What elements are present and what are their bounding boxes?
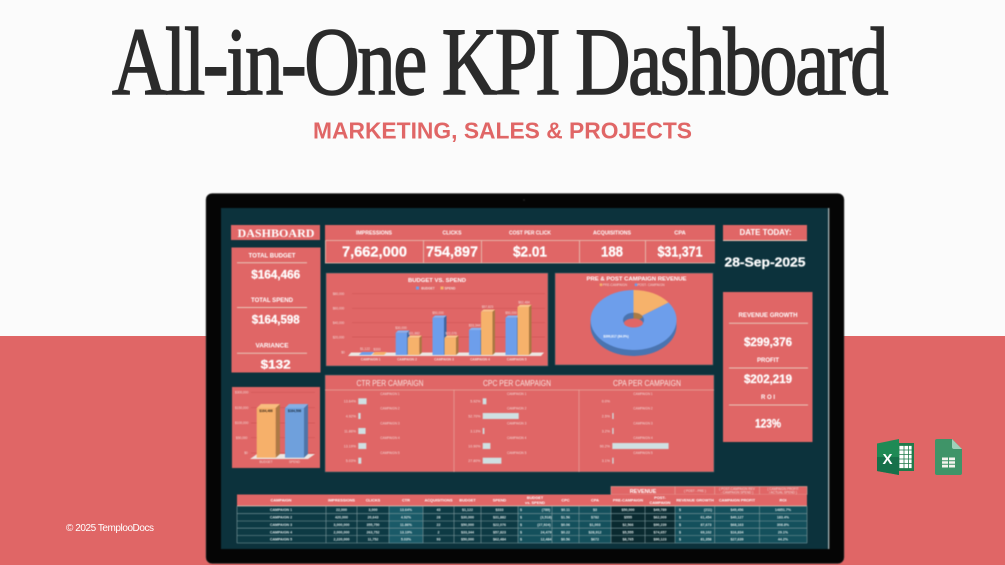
panel: budget vs spend total chart: $100,000 (235, 421, 249, 425)
table row: campaign 1: 14851.7% (775, 508, 792, 512)
table row: campaign 4: $57,823 (493, 530, 506, 534)
table row: campaign 1: $50,000 (622, 508, 634, 512)
panel: revenue growth: $299,376 (744, 337, 792, 349)
table row: campaign 4: 13.19% (400, 530, 413, 534)
revenue table header band: / ACTUAL SPEND ) (769, 490, 797, 494)
table row: campaign 4: 29.1% (778, 530, 789, 534)
table row: campaign 2: (3,518) (540, 516, 552, 520)
bars: campaign 3: $50,000 (432, 311, 444, 315)
panel: dashboard title: DASHBOARD (238, 228, 314, 240)
table row: campaign 3: 355,750 (366, 523, 380, 527)
panel: revenue growth: PROFIT (757, 358, 779, 364)
table row: campaign 5: $27,639 (730, 538, 744, 542)
panel: budget vs spend total chart: $50,000 (236, 436, 248, 440)
subtitle: MARKETING, SALES & PROJECTS (313, 118, 692, 144)
panel: date today: 28-Sep-2025 (724, 256, 806, 270)
table row: campaign 4: 2,000,000 (334, 530, 350, 534)
table header: BUDGET (459, 498, 476, 502)
panel: budget vs spend total chart (232, 387, 320, 468)
table row: campaign 5: 44.2% (778, 538, 789, 542)
legend: SPEND (445, 286, 456, 290)
legend (416, 286, 456, 290)
panel: budget vs spend chart: $80,000 (333, 292, 344, 296)
table row: campaign 2: 420,000 (335, 516, 348, 520)
table header: CAMPAIGN PROFIT (719, 498, 756, 502)
table row: campaign 4: $5,555 (622, 530, 634, 534)
table row: campaign 4: CAMPAIGN 4 (270, 530, 292, 534)
legend: POST- CAMPAIGN (637, 283, 665, 287)
table row: campaign 2: $62,009 (654, 516, 666, 520)
table row: campaign 2: $1.56 (561, 516, 570, 520)
table row: campaign 2: CAMPAIGN 2 (270, 516, 292, 520)
table row: campaign 4: 2 (438, 530, 440, 534)
table row: campaign 2: $31,882 (493, 516, 506, 520)
table row: campaign 5 (270, 538, 789, 542)
panel: revenue growth: $202,219 (744, 374, 792, 386)
pie chart (590, 290, 677, 356)
bars: campaign 1: CAMPAIGN 1 (361, 358, 381, 362)
table row: campaign 3: $50,000 (461, 523, 474, 527)
table row: campaign 3: (27,924) (537, 523, 551, 527)
bars: campaign 3: CAMPAIGN 3 (434, 358, 454, 362)
table row: campaign 5: 5.03% (401, 538, 412, 542)
table row: campaign 3: CAMPAIGN 3 (270, 523, 292, 527)
panel: budget vs spend total chart: $0 (244, 451, 248, 455)
table header: vs. SPEND (525, 500, 545, 505)
panel: KPI strip: CPA (674, 230, 686, 236)
panel: KPI strip: 7,662,000 (342, 244, 407, 260)
bars: campaign 1: $333 (373, 348, 381, 352)
copyright: © 2025 TemplooDocs (66, 523, 154, 534)
panel: KPI strip: IMPRESSIONS (356, 230, 393, 236)
revenue table header band: REVENUE (630, 489, 657, 495)
table row: campaign 3: $ (679, 523, 681, 527)
table row: campaign 5: $62,484 (493, 538, 506, 542)
revenue table header band: ( POST-CAMPAIGN REV (719, 487, 756, 491)
table header: BUDGET (527, 495, 544, 500)
table row: campaign 1: 3,000 (368, 508, 378, 512)
legend: BUDGET (421, 286, 435, 290)
chart: CTR per campaign: 4.92% (346, 414, 357, 418)
table: campaign data (237, 494, 807, 543)
table row: campaign 5: 81,358 (700, 538, 712, 542)
panel: budget vs spend chart: $0 (341, 350, 345, 354)
chart: CTR per campaign: 13.64% (344, 400, 357, 404)
table header: POST- (654, 495, 667, 500)
table row: campaign 3: $ (520, 523, 522, 527)
bars: campaign 1 (359, 347, 387, 362)
chart: CPA per campaign: 3.1% (602, 459, 611, 463)
table header: CAMPAIGN (271, 498, 292, 502)
table row: campaign 3: 11.86% (400, 523, 413, 527)
table row: campaign 3: $0.06 (561, 523, 570, 527)
table row: campaign 5: $8,765 (622, 538, 634, 542)
bars: campaign 5 (505, 300, 532, 362)
legend: PRE-CAMPAIGN (603, 283, 628, 287)
table row: campaign 1: 13.64% (400, 508, 413, 512)
revenue table header band (611, 486, 807, 495)
table row: campaign 3: $2,566 (622, 523, 634, 527)
monitor (206, 194, 844, 564)
table row: campaign 2: $555 (624, 516, 632, 520)
table row: campaign 1: $ (679, 508, 681, 512)
bars: campaign 4 (469, 305, 495, 362)
chart: CPC per campaign: 52.70% (468, 414, 481, 418)
chart: CPA per campaign: 90.2% (600, 444, 611, 448)
panel: budget totals (232, 248, 320, 372)
chart: CPA per campaign: CAMPAIGN 4 (633, 436, 653, 440)
table row: campaign 3 (270, 523, 790, 527)
chart: CTR per campaign: CAMPAIGN 1 (380, 392, 400, 396)
chart: CPA per campaign: 3.2% (602, 429, 611, 433)
bars: campaign 4: $33,344 (469, 324, 480, 328)
chart title: BUDGET VS. SPEND (408, 278, 466, 284)
bar: budget: BUDGET (259, 460, 273, 464)
chart: CPC per campaign: CPC PER CAMPAIGN (483, 379, 551, 388)
chart: CTR per campaign: CAMPAIGN 3 (380, 422, 400, 426)
panel: budget totals: $164,466 (251, 268, 301, 282)
chart: CTR per campaign: 11.86% (344, 429, 357, 433)
panel: budget totals: $132 (261, 358, 291, 372)
chart: CPA per campaign: CAMPAIGN 1 (633, 392, 653, 396)
table header: SPEND (493, 498, 506, 502)
panel: revenue growth: REVENUE GROWTH (738, 313, 798, 319)
table row: campaign 4: $16,834 (730, 530, 744, 534)
panel: KPI strip: ACQUISITIONS (593, 230, 632, 236)
table header: CLICKS (366, 498, 381, 502)
table row: campaign 2: 28 (436, 516, 440, 520)
panel: KPI strip: $31,371 (658, 244, 702, 260)
table header: CPC (561, 498, 570, 502)
table row: campaign 5: $50,000 (461, 538, 474, 542)
chart: CPC per campaign: 10.90% (468, 444, 481, 448)
panel: KPI strip (325, 225, 715, 263)
table header: REVENUE GROWTH (676, 498, 714, 502)
chart: CPC per campaign: 27.80% (468, 459, 481, 463)
chart: CPC per campaign: CAMPAIGN 2 (507, 407, 527, 411)
bars: campaign 4: CAMPAIGN 4 (470, 358, 490, 362)
table row: campaign 4 (270, 530, 789, 534)
chart: CPA per campaign (600, 379, 681, 464)
chart: CPC per campaign: CAMPAIGN 4 (507, 436, 527, 440)
table row: campaign 2 (270, 516, 790, 520)
table header: CPA (591, 498, 599, 502)
table row: campaign 5: $672 (591, 538, 599, 542)
table row: campaign 2: 183.4% (777, 516, 790, 520)
table row: campaign 2: 61,454 (700, 516, 712, 520)
table row: campaign 3: $22,076 (493, 523, 506, 527)
table row: campaign 5: 11,752 (368, 538, 378, 542)
table row: campaign 3: 87,673 (700, 523, 712, 527)
pie chart: $399,817 (84.9%) (603, 335, 629, 339)
table row: campaign 2: $782 (591, 516, 599, 520)
table row: campaign 3: 308.8% (777, 523, 790, 527)
table header: IMPRESSIONS (328, 498, 355, 502)
table row: campaign 2: $40,127 (730, 516, 744, 520)
table row: campaign 5: $ (520, 538, 522, 542)
chart: CTR per campaign: 5.03% (346, 459, 357, 463)
table row: campaign 5: $ (679, 538, 681, 542)
table row: campaign 1: (789) (542, 508, 551, 512)
table row: campaign 2: $ (520, 516, 522, 520)
panel: KPI strip: COST PER CLICK (509, 230, 551, 236)
table row: campaign 1: $49,456 (730, 508, 744, 512)
chart: CPC per campaign (468, 379, 551, 464)
chart: CTR per campaign: CTR PER CAMPAIGN (356, 379, 424, 388)
panel: revenue growth: R O I (761, 395, 775, 401)
bar: spend: $164,598 (288, 409, 301, 413)
panel: budget vs spend chart: $60,000 (333, 306, 344, 310)
table row: campaign 4: $0.22 (561, 530, 570, 534)
table row: campaign 1: $0.11 (561, 508, 570, 512)
table row: campaign 2: 20,643 (368, 516, 378, 520)
chart: CTR per campaign: CAMPAIGN 5 (380, 451, 400, 455)
bar: budget (257, 404, 280, 464)
icon: excel (877, 439, 914, 475)
chart: CTR per campaign (344, 379, 424, 464)
bars: campaign 5: CAMPAIGN 5 (507, 358, 527, 362)
table row: campaign 3: $90,239 (654, 523, 666, 527)
bars: campaign 2: $31,882 (408, 332, 420, 336)
table row: campaign 4: $74,657 (654, 530, 666, 534)
chart: CPC per campaign: CAMPAIGN 5 (507, 451, 527, 455)
table row: campaign 4: 69,102 (700, 530, 712, 534)
chart: CTR per campaign: 13.19% (344, 444, 357, 448)
panel: KPI strip: 754,897 (426, 244, 478, 260)
legend (600, 283, 665, 287)
table row: campaign 2: 4.92% (401, 516, 412, 520)
panel: budget totals: VARIANCE (256, 342, 288, 350)
table row: campaign 1: CAMPAIGN 1 (270, 508, 292, 512)
table header: ROI (780, 498, 786, 502)
chart: CPA per campaign: 2.5% (602, 414, 611, 418)
chart: CTR per campaign: CAMPAIGN 4 (380, 436, 400, 440)
panel: revenue growth (723, 292, 812, 442)
panel: revenue growth: 123% (755, 416, 781, 430)
title: All-in-One KPI Dashboard (112, 9, 888, 115)
table row: campaign 5: $0.56 (561, 538, 570, 542)
bars: campaign 4: $57,823 (482, 305, 493, 309)
revenue table header band: ( CAMPAIGN PROFIT (767, 487, 799, 491)
panel: budget vs spend chart: $20,000 (333, 335, 344, 339)
table row: campaign 3: 22 (436, 523, 440, 527)
bars: campaign 2: CAMPAIGN 2 (397, 358, 417, 362)
table row: campaign 4: $28,912 (588, 530, 602, 534)
table row: campaign 1: (211) (704, 508, 713, 512)
panel: per campaign charts (325, 375, 714, 472)
table row: campaign 1: $49,789 (654, 508, 666, 512)
chart: CPA per campaign: CAMPAIGN 3 (633, 422, 653, 426)
chart: CPC per campaign: CAMPAIGN 3 (507, 422, 527, 426)
table row: campaign 3: $1,003 (590, 523, 600, 527)
table row: campaign 2: $30,000 (461, 516, 474, 520)
bars: campaign 5: $62,484 (518, 300, 530, 304)
panel: KPI strip: $2.01 (513, 244, 547, 260)
table row: campaign 1: $ (520, 508, 522, 512)
bar: spend: SPEND (289, 460, 301, 464)
chart: CTR per campaign: CAMPAIGN 2 (380, 407, 400, 411)
panel: dashboard title (231, 225, 320, 240)
chart: CPC per campaign: CAMPAIGN 1 (507, 392, 527, 396)
table row: campaign 5: 93 (436, 538, 440, 542)
panel: date today: DATE TODAY: (740, 228, 792, 237)
panel: budget totals: $164,598 (252, 312, 300, 326)
chart: CPA per campaign: 0.0% (602, 400, 611, 404)
table row: campaign 1: 22,000 (336, 508, 347, 512)
icon: excel: X (882, 451, 893, 468)
bars: campaign 5: $50,000 (505, 311, 517, 315)
table row: campaign 4: 24,479 (540, 530, 552, 534)
bar: spend (285, 404, 308, 464)
panel: date today (723, 225, 807, 270)
table row: campaign 1: $333 (496, 508, 504, 512)
table row: campaign 3: 3,000,000 (334, 523, 350, 527)
bar: budget: $164,466 (259, 409, 273, 413)
panel: pre and post campaign revenue (555, 273, 713, 365)
table header: ACQUISITIONS (424, 498, 453, 502)
table row: campaign 5: 12,484 (540, 538, 552, 542)
revenue table header band: - CAMPAIGN SPEND ) (721, 490, 753, 494)
panel: budget vs spend total chart: $300,000 (235, 390, 249, 394)
table row: campaign 3: $68,163 (730, 523, 744, 527)
panel: budget vs spend chart: $40,000 (333, 321, 344, 325)
table header: CAMPAIGN (650, 500, 671, 505)
chart: CPA per campaign: CAMPAIGN 2 (633, 407, 653, 411)
table row: campaign 1: $3 (593, 508, 597, 512)
table row: campaign 1: 43 (436, 508, 440, 512)
table row: campaign 5: CAMPAIGN 5 (270, 538, 292, 542)
table header: PRE-CAMPAIGN (613, 498, 643, 502)
panel: budget vs spend total chart: $150,000 (235, 406, 249, 410)
table row: campaign 4: 263,752 (366, 530, 380, 534)
bars: campaign 2 (395, 326, 422, 362)
bars: campaign 1: $1,122 (360, 347, 370, 351)
revenue table header band: ( POST - PRE ) (684, 489, 706, 493)
table row: campaign 5: 2,220,000 (334, 538, 350, 542)
chart: CPA per campaign: CAMPAIGN 5 (633, 451, 653, 455)
table header (271, 495, 786, 505)
chart: CPC per campaign: 5.92% (470, 400, 481, 404)
bars: campaign 3: $22,076 (445, 332, 457, 336)
table row: campaign 4: $33,344 (461, 530, 474, 534)
table row: campaign 1 (270, 508, 792, 512)
bars: campaign 2: $30,000 (395, 326, 407, 330)
chart title: PRE & POST CAMPAIGN REVENUE (586, 276, 687, 282)
panel: budget totals: TOTAL BUDGET (248, 252, 296, 260)
panel: budget vs spend chart (326, 273, 548, 366)
panel: KPI strip: 188 (601, 244, 623, 260)
panel: KPI strip: CLICKS (442, 230, 462, 236)
panel: budget totals: TOTAL SPEND (251, 297, 293, 304)
icon: google sheets (935, 439, 962, 475)
chart: CPC per campaign: 3.13% (470, 429, 481, 433)
table row: campaign 4: $ (679, 530, 681, 534)
table row: campaign 1: $1,122 (462, 508, 473, 512)
table header: CTR (402, 498, 410, 502)
bars: campaign 3 (432, 311, 458, 362)
table row: campaign 4: $ (520, 530, 522, 534)
chart: CPA per campaign: CPA PER CAMPAIGN (613, 379, 681, 388)
table row: campaign 5: $90,123 (654, 538, 666, 542)
table row: campaign 2: $ (679, 516, 681, 520)
